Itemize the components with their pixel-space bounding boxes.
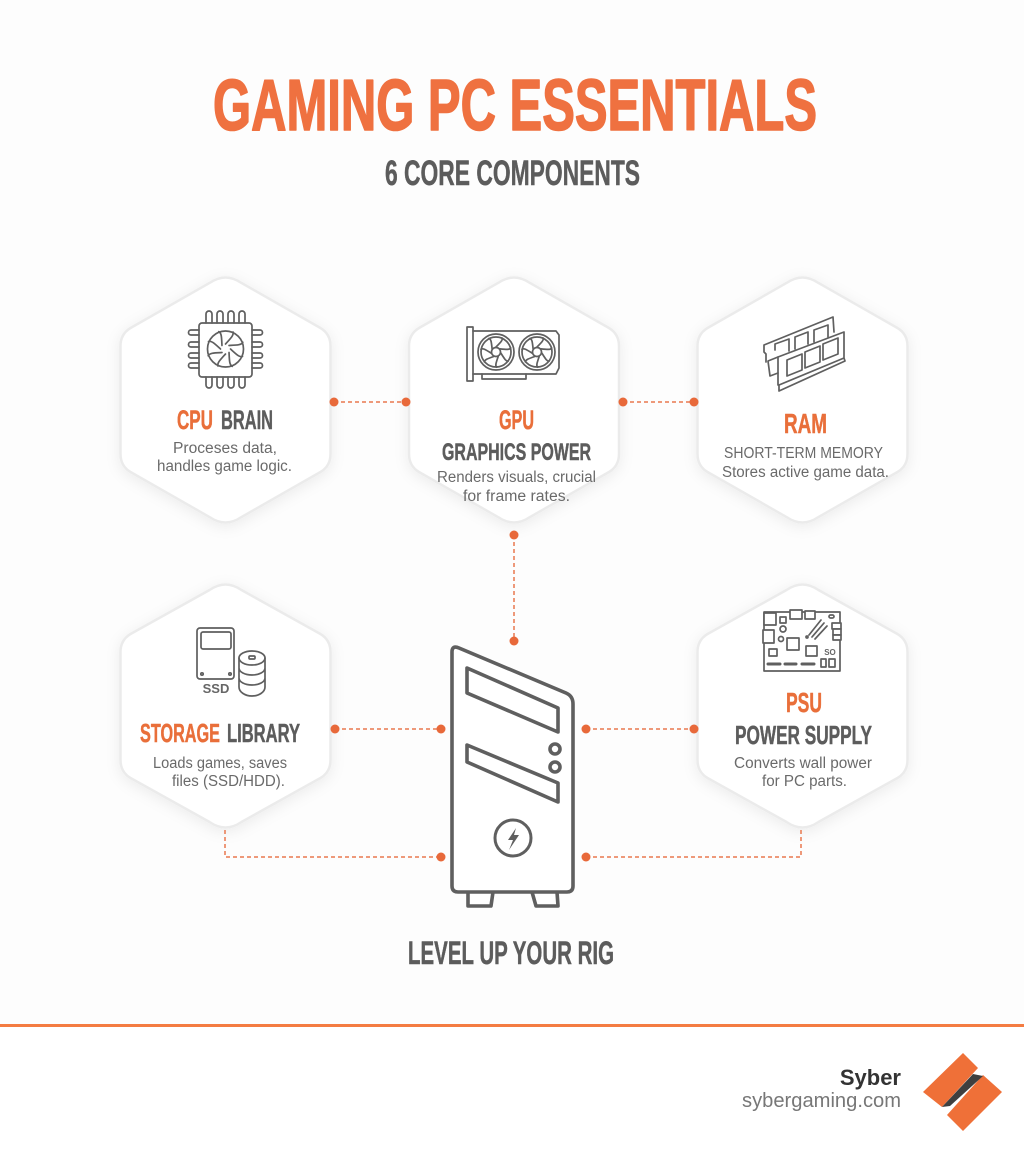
subtitle: 6 CORE COMPONENTS	[385, 154, 640, 193]
brand url: sybergaming.com	[742, 1090, 901, 1112]
heading: Library: LIBRARY	[227, 718, 300, 748]
text: Storage description: files (SSD/HDD).	[172, 773, 285, 790]
connector: case to PSU	[582, 724, 698, 734]
text: Storage description: Loads games, saves	[153, 755, 287, 772]
text: CPU description	[157, 440, 292, 475]
heading: CPU: CPU	[177, 405, 213, 435]
text: Storage description	[153, 755, 287, 790]
caption: LEVEL UP YOUR RIG	[408, 935, 614, 971]
heading: Power Supply: POWER SUPPLY	[735, 720, 872, 750]
connector: CPU to GPU	[330, 398, 410, 406]
icon: circuit board	[763, 610, 841, 671]
connector: GPU to case	[510, 530, 518, 646]
heading: PSU: PSU	[786, 687, 822, 718]
footer	[0, 1024, 1024, 1154]
brand name: Syber	[840, 1065, 901, 1090]
heading: Graphics Power: GRAPHICS POWER	[442, 439, 591, 466]
panel: PSU	[698, 584, 908, 828]
text: RAM description: SHORT-TERM MEMORY	[724, 445, 883, 462]
text: CPU description: handles game logic.	[157, 458, 292, 475]
panel: CPU	[120, 278, 330, 522]
text: PSU description: for PC parts.	[762, 773, 847, 790]
text: RAM description: Stores active game data.	[722, 464, 889, 481]
heading: GPU: GPU	[499, 405, 534, 435]
text: GPU description: Renders visuals, crucial	[437, 469, 596, 486]
panel: RAM	[698, 278, 908, 522]
heading: Storage: STORAGE	[140, 718, 220, 748]
heading: Brain: BRAIN	[221, 405, 273, 435]
text: PSU description	[734, 755, 872, 790]
logo	[923, 1053, 1002, 1131]
text: GPU description	[437, 469, 596, 505]
icon: SSD and disk	[197, 628, 265, 696]
footer rule	[0, 1024, 1024, 1027]
connector: PSU bottom to case	[582, 830, 801, 862]
icon: CPU chip	[188, 311, 262, 388]
connector: Storage bottom to case	[225, 830, 446, 862]
icon label: board marking: SO	[824, 648, 836, 657]
icon: PC tower	[452, 647, 573, 906]
heading: RAM: RAM	[784, 408, 827, 439]
panel: Storage	[120, 584, 330, 828]
icon: graphics card	[467, 327, 559, 381]
text: PSU description: Converts wall power	[734, 755, 872, 772]
text: GPU description: for frame rates.	[463, 488, 570, 505]
panel: GPU	[409, 278, 619, 522]
text: RAM description	[722, 445, 889, 481]
connector: Storage to case	[330, 724, 446, 734]
connector: GPU to RAM	[618, 398, 698, 406]
icon label: SSD: SSD	[203, 681, 229, 696]
icon: RAM sticks	[764, 317, 845, 391]
text: CPU description: Proceses data,	[173, 440, 277, 457]
